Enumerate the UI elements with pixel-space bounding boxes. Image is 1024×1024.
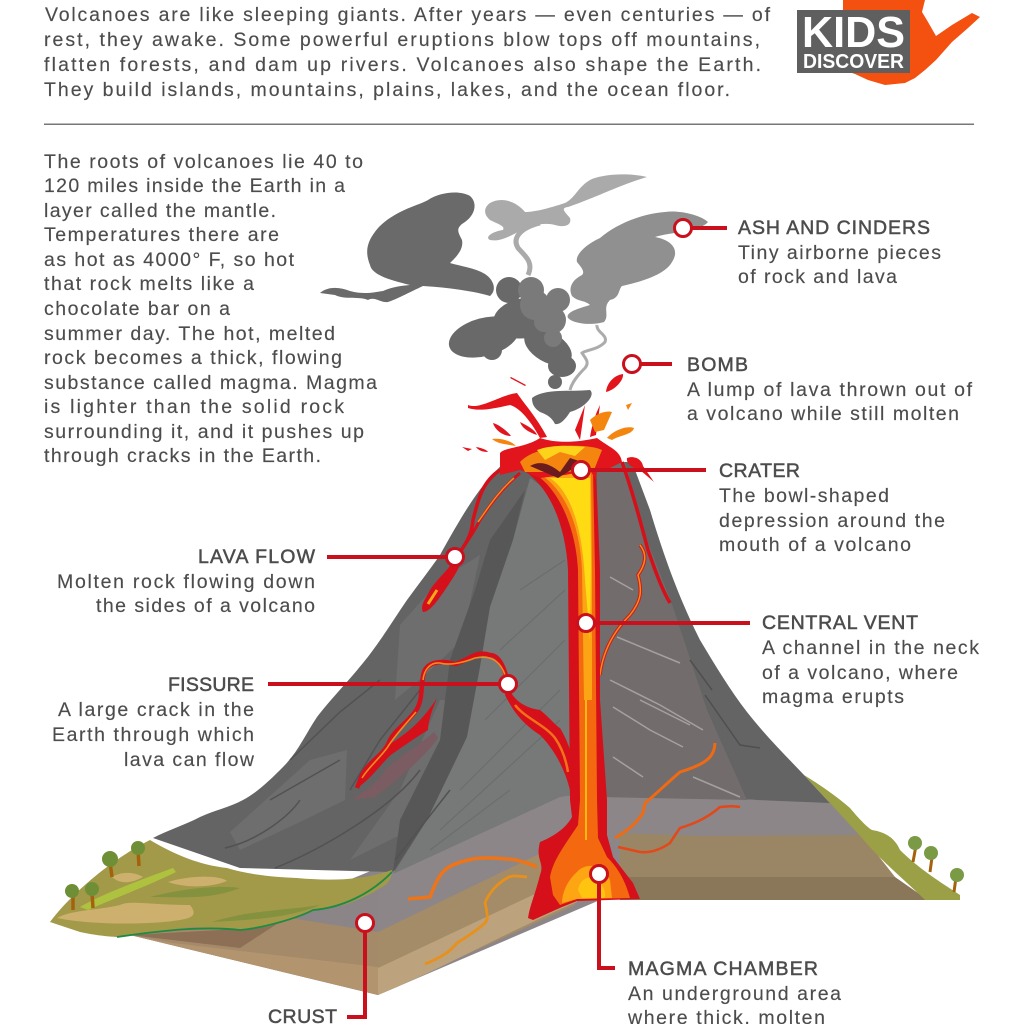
callout: bomb: A lump of lava thrown out of: [687, 379, 973, 401]
logo: Kids Discover: [797, 0, 980, 85]
illustration: left grassy land: [50, 840, 392, 937]
body text: roots of volcanoes: layer called the mantle.: [44, 200, 276, 222]
lower right roots: [615, 743, 715, 838]
left face layers: [130, 868, 378, 995]
body text: roots of volcanoes: through cracks in the Earth.: [44, 445, 321, 467]
intro text: rest, they awake. Some powerful eruptions blow tops off mountains,: [44, 29, 760, 51]
body text: roots of volcanoes: as hot as 4000° F, so hot: [44, 249, 295, 271]
intro text: They build islands, mountains, plains, lakes, and the ocean floor.: [44, 79, 730, 101]
light plume right: [568, 212, 708, 390]
callout: crater: mouth of a volcano: [719, 534, 911, 556]
right slope cracks: [690, 660, 760, 748]
callout: ash and cinders: of rock and lava: [738, 266, 897, 288]
central light wedge: [393, 478, 574, 874]
body text: roots of volcanoes: Temperatures there are: [44, 224, 279, 246]
callout: central vent: magma erupts: [762, 686, 904, 708]
body text: roots of volcanoes: The roots of volcanoes lie 40 to: [44, 151, 363, 173]
illustration: lava and magma: [352, 374, 740, 964]
callout: bomb: [624, 354, 973, 425]
lower left roots: [408, 858, 537, 899]
callout: lava flow: Molten rock flowing down: [57, 571, 315, 593]
mushroom puff: [532, 390, 592, 424]
body text: roots of volcanoes: substance called magma. Magma: [44, 372, 377, 394]
illustration: smoke and ash cloud: [320, 174, 708, 424]
vent yellow core: [540, 472, 592, 700]
body text: roots of volcanoes: 120 miles inside the Earth in a: [44, 175, 345, 197]
callout: bomb: BOMB: [687, 354, 748, 376]
body text: roots of volcanoes: [44, 151, 377, 467]
dark plume left: [320, 193, 494, 302]
callout: crater: depression around the: [719, 510, 945, 532]
vent orange core: [535, 470, 630, 905]
cracks on left slope: [225, 680, 450, 868]
callout: crater: CRATER: [719, 460, 800, 482]
callout: central vent: of a volcano, where: [762, 662, 958, 684]
intro text: flatten forests, and dam up rivers. Volcanoes also shape the Earth.: [44, 54, 761, 76]
logo: Kids Discover: DISCOVER: [803, 51, 905, 73]
callout: magma chamber: MAGMA CHAMBER: [628, 958, 818, 980]
lava bombs and splatter: [462, 374, 654, 482]
callout: fissure: lava can flow: [124, 749, 255, 771]
callout: crust: [268, 914, 374, 1024]
right vein: [600, 545, 645, 675]
logo: Kids Discover: KIDS: [802, 8, 905, 57]
lighter left patches: [230, 555, 480, 860]
intro text: [44, 4, 771, 101]
trees: [65, 841, 145, 910]
callout: central vent: CENTRAL VENT: [762, 612, 918, 634]
right face streaks: [610, 577, 740, 797]
light wisp top: [485, 174, 647, 275]
illustration: right grassy land: [804, 775, 964, 900]
callout: lava flow: the sides of a volcano: [96, 595, 315, 617]
callout: fissure: Earth through which: [52, 724, 254, 746]
illustration: mountain: [153, 462, 830, 874]
dark band: [393, 490, 525, 872]
mid-grey column: [518, 277, 570, 347]
wedge grain: [430, 560, 565, 850]
dark column: [444, 277, 578, 389]
callout: bomb: a volcano while still molten: [687, 403, 959, 425]
body text: roots of volcanoes: rock becomes a thick, flowing: [44, 347, 342, 369]
intro text: Volcanoes are like sleeping giants. After years — even centuries — of: [45, 4, 771, 26]
callout: fissure: FISSURE: [168, 674, 254, 696]
callout: ash and cinders: [674, 217, 941, 288]
body text: roots of volcanoes: surrounding it, and it pushes up: [44, 421, 364, 443]
body text: roots of volcanoes: is lighter than the solid rock: [44, 396, 344, 418]
callout: ash and cinders: ASH AND CINDERS: [738, 217, 930, 239]
callout: magma chamber: An underground area: [628, 983, 841, 1005]
callout: central vent: [578, 612, 979, 708]
right face: [597, 462, 747, 800]
lava flow down left side: [422, 470, 520, 612]
right edge lava: [622, 462, 670, 603]
body text: roots of volcanoes: summer day. The hot, melted: [44, 323, 335, 345]
front face layers: [378, 790, 928, 995]
fissure branch: [352, 654, 574, 800]
callout: fissure: [52, 674, 516, 771]
callout: fissure: A large crack in the: [58, 699, 254, 721]
body text: roots of volcanoes: chocolate bar on a: [44, 298, 230, 320]
body text: roots of volcanoes: that rock melts like a: [44, 273, 254, 295]
callout: lava flow: [57, 546, 464, 617]
callout: central vent: A channel in the neck: [762, 637, 979, 659]
callout: ash and cinders: Tiny airborne pieces: [738, 242, 941, 264]
illustration: earth block cross-section: [130, 790, 928, 995]
magma chamber glow: [562, 866, 612, 903]
callout: crater: [572, 460, 945, 556]
callout: crater: The bowl-shaped: [719, 485, 889, 507]
crater: [500, 438, 622, 480]
callout: lava flow: LAVA FLOW: [198, 546, 316, 568]
central vent: [523, 470, 640, 920]
callout: magma chamber: [590, 866, 841, 1024]
